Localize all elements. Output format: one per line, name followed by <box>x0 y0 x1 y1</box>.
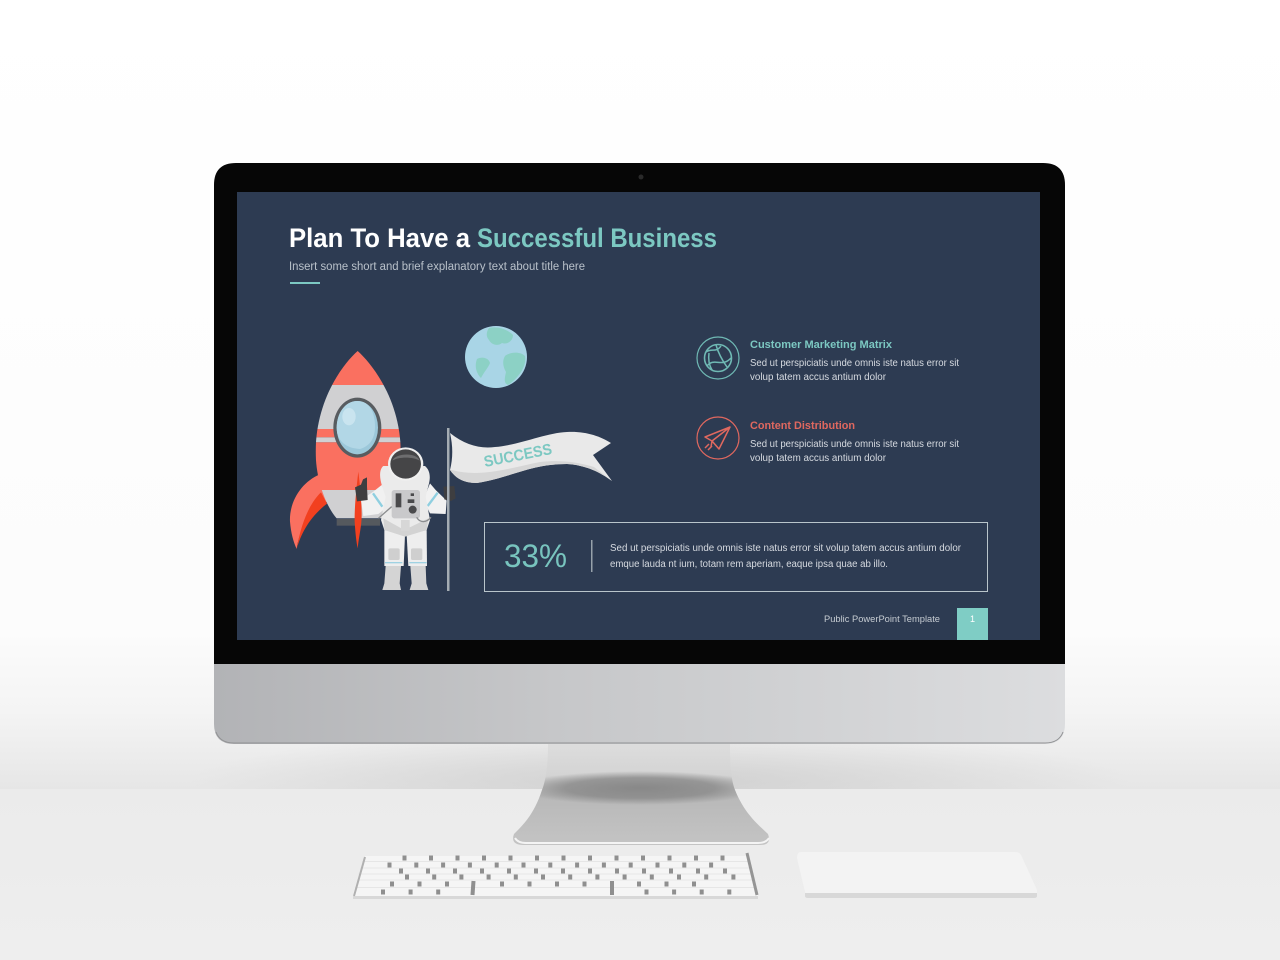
feature: content distribution <box>697 417 959 464</box>
subtitle: Insert some short and brief explanatory text about title here <box>289 261 585 273</box>
illustration: rocket <box>290 348 403 549</box>
stat description: emque lauda nt ium, totam rem aperiam, eaque ipsa quae ab illo. <box>610 559 888 570</box>
flag pole <box>447 428 450 591</box>
illustration: success flag <box>447 428 612 591</box>
body text: Sed ut perspiciatis unde omnis iste natus error sit <box>750 358 959 369</box>
arm right <box>423 483 447 514</box>
rocket centre fin <box>355 472 362 548</box>
rocket body <box>313 348 403 520</box>
keyboard <box>353 853 758 899</box>
glove right <box>443 486 456 501</box>
monitor body <box>214 163 1065 744</box>
heading: Customer Marketing Matrix <box>750 339 893 351</box>
body text: volup tatem accus antium dolor <box>750 453 887 464</box>
boots <box>382 566 401 590</box>
leg right <box>407 530 427 566</box>
footer label: Public PowerPoint Template <box>824 614 940 624</box>
trackpad <box>797 852 1037 898</box>
leg left <box>384 530 405 566</box>
helmet <box>388 447 423 481</box>
body text <box>750 358 959 383</box>
flag banner <box>450 432 612 483</box>
title: Plan To Have a <box>289 223 471 253</box>
stat description <box>610 543 962 570</box>
illustration: astronaut <box>355 447 456 590</box>
heading: Content Distribution <box>750 420 855 432</box>
hose <box>378 507 431 522</box>
flag label: SUCCESS <box>483 441 553 471</box>
page number badge <box>957 608 988 640</box>
rocket window <box>333 398 381 458</box>
knee pads and cuffs <box>385 548 427 563</box>
suit torso and shoulders <box>380 466 430 537</box>
stat value: 33% <box>504 538 567 574</box>
monitor stand <box>505 744 775 846</box>
slide screen <box>237 192 1040 640</box>
rocket base <box>337 519 380 526</box>
callout: 33% stat <box>484 522 988 592</box>
body text <box>750 439 959 464</box>
title <box>289 223 717 253</box>
glove left <box>355 477 368 501</box>
stat description: Sed ut perspiciatis unde omnis iste natus error sit volup tatem accus antium dolor <box>610 543 962 554</box>
icon: paper plane <box>697 417 739 459</box>
body text: volup tatem accus antium dolor <box>750 372 887 383</box>
icon: network globe <box>697 337 739 379</box>
body text: Sed ut perspiciatis unde omnis iste natus error sit <box>750 439 959 450</box>
arm left <box>361 485 392 516</box>
title: Successful Business <box>477 223 717 253</box>
icon: globe planet <box>465 326 527 388</box>
title underline <box>290 282 320 284</box>
page number badge: 1 <box>970 614 975 624</box>
feature: customer marketing matrix <box>697 337 959 383</box>
chest pack <box>392 490 420 518</box>
rocket left fin <box>290 474 327 549</box>
